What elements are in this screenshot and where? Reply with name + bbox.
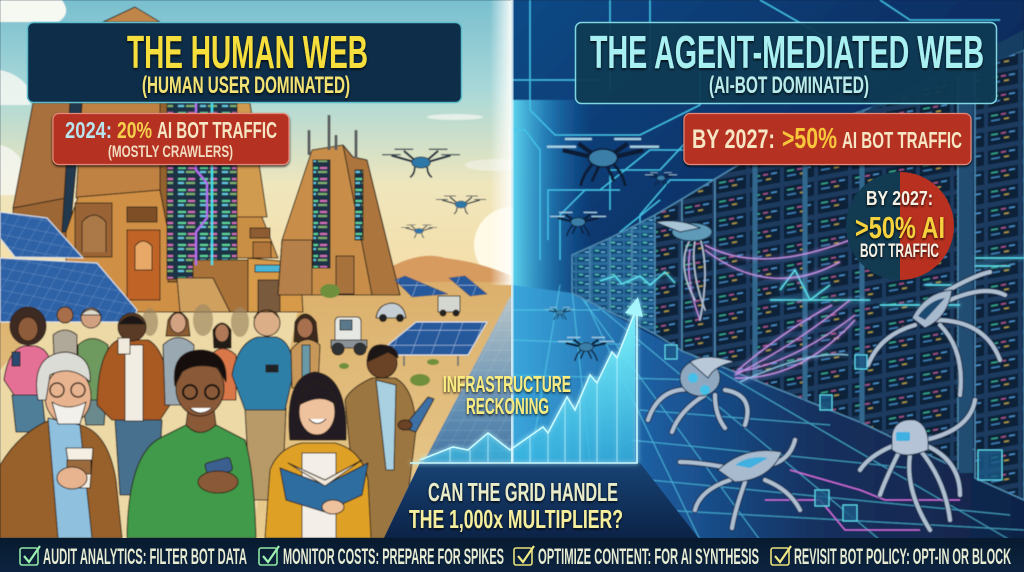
right drones <box>545 139 677 361</box>
item: optimize content <box>514 544 759 569</box>
center label: infrastructure reckoning: INFRASTRUCTURE <box>443 371 571 397</box>
person: woman in orange <box>211 323 236 400</box>
robot: crescent-head octopus <box>648 357 748 432</box>
item: audit analytics: AUDIT ANALYTICS: FILTER BOT DATA <box>43 544 247 569</box>
left drones <box>382 149 486 238</box>
item: audit analytics <box>20 544 247 569</box>
magenta floor traces <box>765 470 960 530</box>
center label: infrastructure reckoning <box>443 371 571 419</box>
person: man in grey <box>53 307 77 380</box>
dark slit <box>62 103 82 232</box>
person: man in blue sweater <box>232 310 293 500</box>
cyan status waves on racks <box>600 258 1024 305</box>
panel: infrastructure reckoning center wedge <box>383 0 700 540</box>
pink data fibers <box>689 240 855 382</box>
center solar array <box>388 322 487 355</box>
callout: 2024 bot traffic: (MOSTLY CRAWLERS) <box>108 142 233 161</box>
service robot <box>331 317 367 355</box>
heading panel: the human web <box>28 22 462 102</box>
circuit traces <box>512 0 1000 260</box>
central cyan glow <box>512 100 592 300</box>
donut badge: by 2027 over 50 percent <box>846 172 954 280</box>
callout: 2024 bot traffic: AI BOT TRAFFIC <box>157 117 277 143</box>
dark blue background <box>512 0 1024 540</box>
solar strip along divider <box>383 297 512 540</box>
action checklist bar: MONITOR COSTS: PREPARE FOR SPIKES <box>283 544 504 569</box>
callout: 2024 bot traffic: 20% <box>117 117 152 143</box>
person: man with tablet <box>345 345 434 538</box>
donut badge: by 2027 over 50 percent: >50% AI <box>855 210 945 245</box>
background crowd shapes <box>142 304 249 337</box>
right tower <box>278 145 400 295</box>
lower chart floor <box>383 463 700 540</box>
sun <box>474 207 550 283</box>
heading panel: the agent-mediated web <box>576 22 996 104</box>
callout: 2024 bot traffic: 2024: <box>65 117 112 143</box>
callout: by 2027 bot traffic: AI BOT TRAFFIC <box>842 127 962 153</box>
carved panels <box>75 203 112 257</box>
donut badge: by 2027 over 50 percent: BOT TRAFFIC <box>860 241 939 262</box>
pyramid tower main <box>13 7 400 312</box>
tower left wing <box>13 103 70 208</box>
person: older man with coffee <box>0 352 122 538</box>
panel: agent-mediated web scene <box>512 0 1024 540</box>
server column <box>167 103 237 279</box>
person: woman in tan coat <box>291 314 320 388</box>
callout: by 2027 bot traffic: >50% <box>782 123 837 155</box>
server racks <box>572 50 1024 500</box>
cyan and purple data lines <box>196 103 212 265</box>
callout: by 2027 bot traffic <box>684 114 971 164</box>
floor grid <box>512 285 1024 540</box>
tower center <box>76 103 162 198</box>
donut badge: by 2027 over 50 percent: BY 2027: <box>866 188 933 210</box>
side glow at divider <box>490 0 512 285</box>
robot: octopus right <box>860 400 975 530</box>
divider light <box>511 0 514 463</box>
light walkway <box>0 300 300 540</box>
person: woman in grey <box>163 312 194 405</box>
panel: human web scene <box>0 0 550 540</box>
robot: top squid <box>655 221 712 320</box>
center question <box>409 477 623 534</box>
center question: THE 1,000x MULTIPLIER? <box>409 504 623 534</box>
person: man in green shirt <box>127 350 256 538</box>
floating holographic icons <box>665 345 1002 521</box>
sky background <box>0 0 512 300</box>
vehicles <box>376 296 460 322</box>
callout: 2024 bot traffic <box>53 114 289 164</box>
item: optimize content: OPTIMIZE CONTENT: FOR AI SYNTHESIS <box>538 544 759 569</box>
person: woman in pink <box>4 307 50 432</box>
rack pilasters <box>755 72 966 473</box>
person: man in orange jacket <box>97 313 170 495</box>
people crowd <box>0 307 434 538</box>
left solar panels <box>0 212 137 322</box>
line chart: 1000x spike <box>410 297 643 463</box>
clouds <box>0 0 525 195</box>
item: monitor costs <box>259 544 504 569</box>
front building <box>193 260 250 312</box>
subtitle: (AI-BOT DOMINATED) <box>709 72 869 99</box>
center label: infrastructure reckoning: RECKONING <box>466 393 549 419</box>
person: man in green sweater <box>78 308 110 425</box>
person: woman with book <box>265 372 371 538</box>
callout: by 2027 bot traffic: BY 2027: <box>692 124 775 154</box>
tower right wing <box>236 103 267 217</box>
robot: upper right <box>868 272 1005 395</box>
robot: crab <box>680 440 800 528</box>
antennas <box>309 115 356 158</box>
desert hills <box>385 256 512 310</box>
floor <box>512 285 1024 540</box>
title: THE HUMAN WEB <box>127 26 368 78</box>
background solar arrays <box>395 276 487 297</box>
subtitle: (HUMAN USER DOMINATED) <box>142 72 350 99</box>
shrubs <box>320 284 439 386</box>
desert ground <box>0 282 512 540</box>
rack top section right <box>870 30 1024 111</box>
center question: CAN THE GRID HANDLE <box>428 477 618 507</box>
action checklist bar <box>0 538 1024 572</box>
